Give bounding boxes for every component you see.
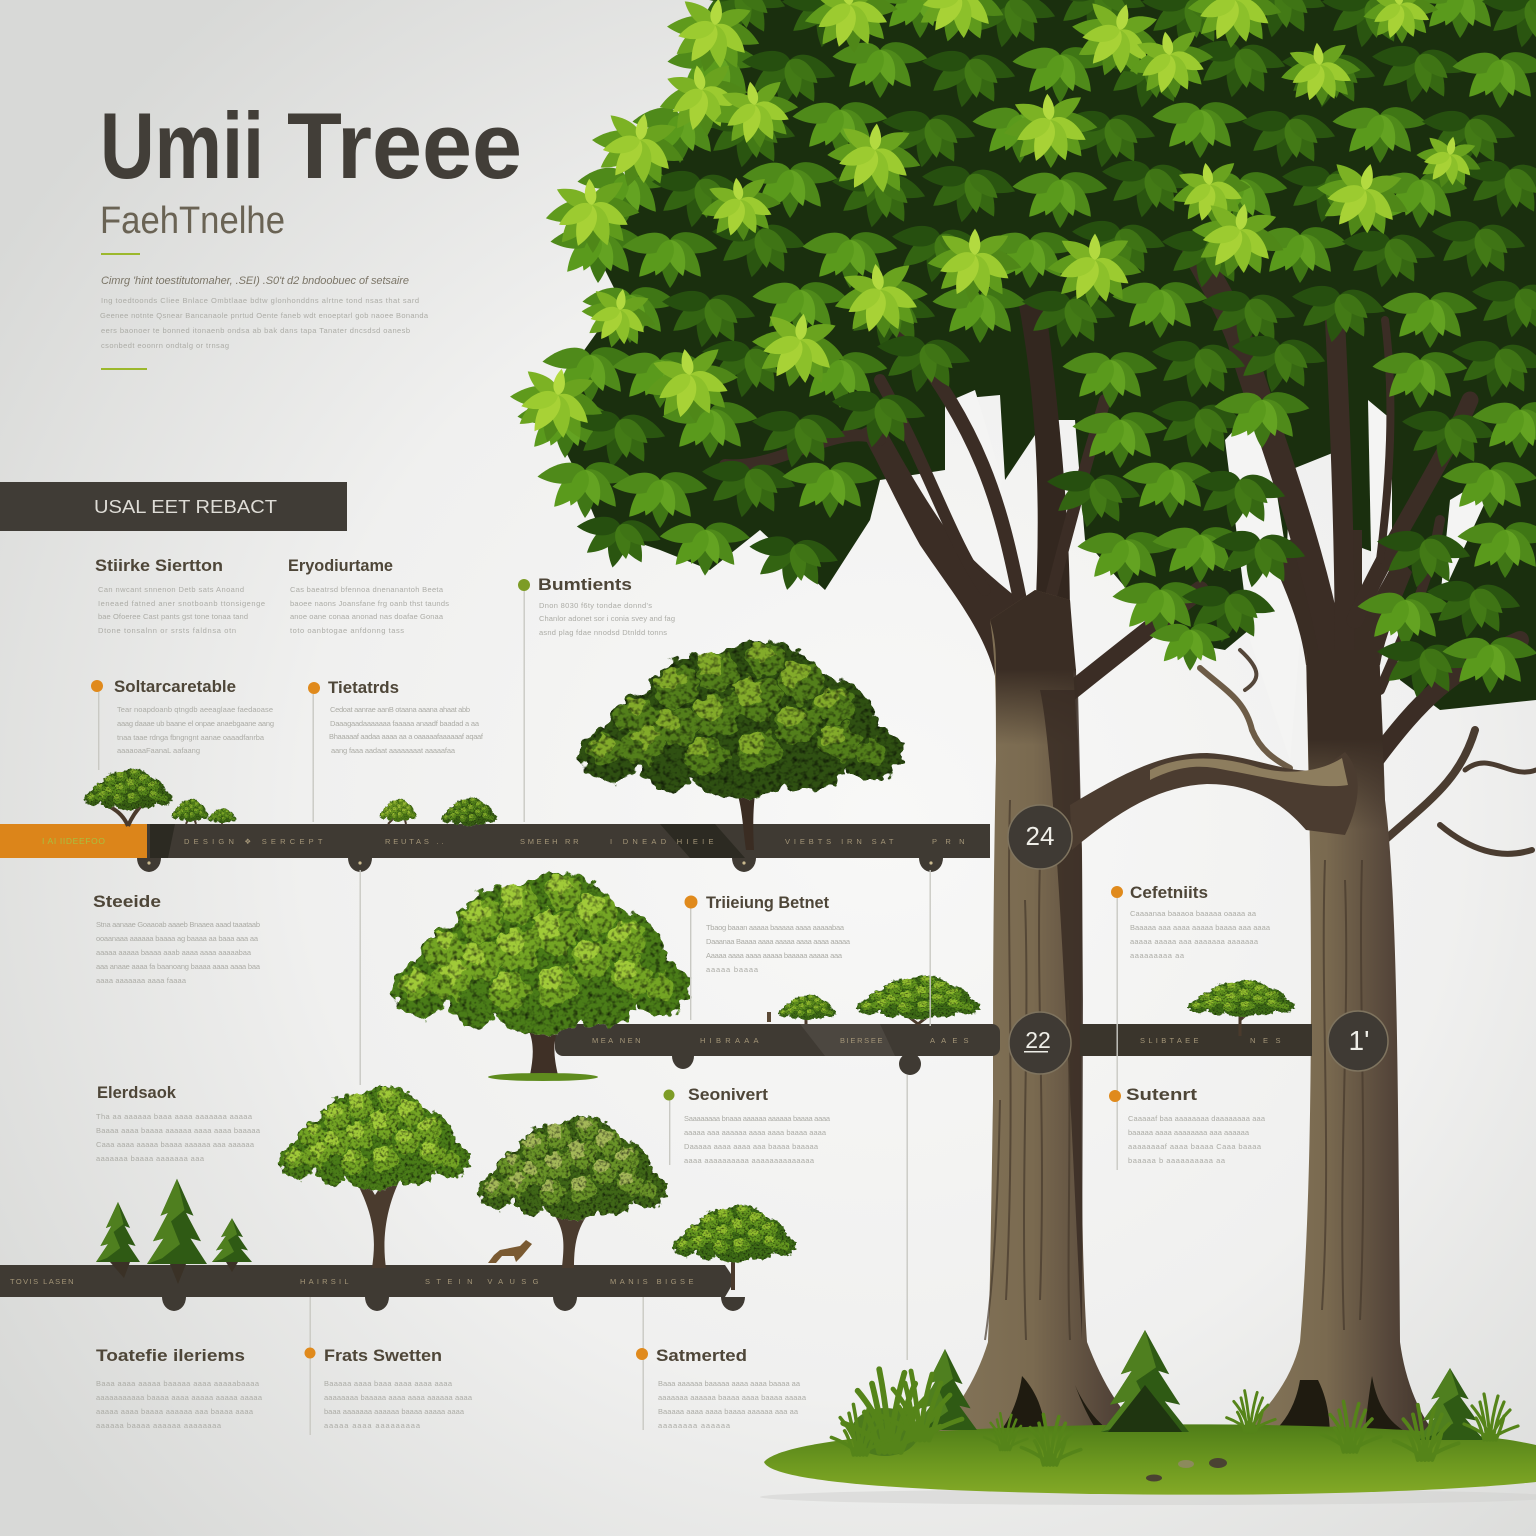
small trees: middle band <box>767 975 979 1024</box>
title: Treee <box>287 93 522 198</box>
block: Eryodiurtame: baoee naons Joansfane frg oanb thst taunds <box>290 599 449 608</box>
block: Toatefie ileriems <box>96 1346 263 1430</box>
badge: 22 <box>1009 1012 1071 1074</box>
block: Toatefie ileriems: Toatefie ileriems <box>96 1346 245 1365</box>
block: Tietatrds: Cedoat aanrae aanB otaana aaana ahaat abb <box>330 705 470 714</box>
block: Toatefie ileriems: Baaa aaaa aaaaa baaaaa aaaa aaaaabaaaa <box>96 1379 260 1388</box>
block: Sutenrt: aaaaaaaaf aaaa baaaa Caaa baaaa <box>1128 1142 1262 1151</box>
band: lower timeline <box>0 1265 745 1311</box>
block: Sutenrt: Caaaaaf baa aaaaaaaa daaaaaaaa aaa <box>1128 1114 1266 1123</box>
large tree: bright green <box>392 871 688 1081</box>
block: Toatefie ileriems: aaaaaa baaaa aaaaaa aaaaaaaa <box>96 1421 222 1430</box>
small trees: top band middle <box>380 797 497 826</box>
big tree: right trunk <box>1230 650 1443 1442</box>
block: Elerdsaok: aaaaaaa baaaa aaaaaaa aaa <box>96 1154 205 1163</box>
block: Steeide: aaaa aaaaaaa aaaa faaaa <box>96 976 187 985</box>
block: Soltarcaretable: Soltarcaretable <box>114 677 236 696</box>
badge: 24 <box>1008 805 1072 869</box>
block: Tietatrds: aang faaa aadaat aaaaaaaat aaaaafaa <box>331 746 456 755</box>
band: lower timeline: STEIN VAUSG <box>425 1277 540 1286</box>
block: Satmerted <box>636 1297 807 1430</box>
title: Umii <box>100 93 264 198</box>
big tree: canopy back <box>550 0 1536 710</box>
intro text block: csonbedt eoonrn ondtalg or trnsag <box>101 341 229 350</box>
block: Elerdsaok: Elerdsaok <box>97 1083 177 1102</box>
block: Soltarcaretable <box>91 677 274 770</box>
block: Tietatrds: Tietatrds <box>328 678 399 697</box>
block: Frats Swetten <box>304 1297 473 1435</box>
small trees: top band left <box>84 768 236 826</box>
band nodes <box>672 1053 921 1075</box>
band: middle timeline: MEA NEN <box>592 1036 642 1045</box>
block: Frats Swetten: Baaaaa aaaa baaa aaaa aaaa aaaa <box>324 1379 453 1388</box>
badge: 24: 24 <box>1026 821 1054 851</box>
block: Seonivert: aaaa aaaaaaaaaa aaaaaaaaaaaaaa <box>684 1156 815 1165</box>
intro text block: eers baonoer te bonned itonaenb ondsa ab bak dans tapa Tanater dncsdsd oanesb <box>101 326 410 335</box>
block: Sutenrt: baaaaa b aaaaaaaaaa aa <box>1128 1156 1226 1165</box>
block: Frats Swetten: aaaaa aaaa aaaaaaaaa <box>324 1421 421 1430</box>
block: Eryodiurtame: toto oanbtogae anfdonng tass <box>290 626 404 635</box>
ground plants <box>831 1330 1518 1482</box>
block: Frats Swetten: aaaaaaaa baaaaa aaaa aaaa aaaaaa aaaa <box>324 1393 473 1402</box>
connector: lower-right <box>906 1075 908 1360</box>
block: Eryodiurtame: Eryodiurtame <box>288 556 393 575</box>
big tree: left trunk <box>923 590 1166 1445</box>
block: Seonivert: aaaaa aaa aaaaaa aaaa aaaa baaaa aaaa <box>684 1128 827 1137</box>
band: top timeline <box>0 824 990 872</box>
block: Steeide: ooaanaaa aaaaaa baaaa ag baaaa aa baaa aaa aa <box>96 934 259 943</box>
block: Cefetniits: aaaaa aaaaa aaa aaaaaaa aaaaaaa <box>1130 937 1259 946</box>
small tree: lower right <box>673 1204 795 1290</box>
connector: middle-left <box>360 870 361 1085</box>
band: top timeline: VIEBTS IRN SAT <box>785 837 895 846</box>
big tree: leaf mass <box>516 0 1536 699</box>
band: top timeline: I DNEAD HIEIE <box>610 837 715 846</box>
block: Soltarcaretable: aaag daaae ub baane el onpae anaebgaane aang <box>117 719 274 728</box>
block: Sutenrt <box>1109 1085 1266 1165</box>
block: Seonivert <box>664 1085 831 1165</box>
band: lower timeline: TOVIS LASEN <box>10 1277 75 1286</box>
block: Elerdsaok: Caaa aaaa aaaaa baaaa aaaaaa aaa aaaaaa <box>96 1140 255 1149</box>
block: Sutenrt: Sutenrt <box>1126 1085 1197 1104</box>
block: Triieiung Betnet: Daaanaa Baaaa aaaa aaaaa aaaa aaaa aaaaa <box>706 937 851 946</box>
block: Satmerted: Satmerted <box>656 1346 747 1365</box>
block: Tietatrds: Daaagaadaaaaaaa faaaaa anaadf baadad a aa <box>330 719 480 728</box>
callout: orange tab <box>0 824 147 858</box>
block: Sutenrt: baaaaa aaaa aaaaaaaa aaa aaaaaa <box>1128 1128 1250 1137</box>
band: top timeline: SMEEH RR <box>520 837 580 846</box>
title <box>100 93 522 198</box>
block: Triieiung Betnet: aaaaa baaaa <box>706 965 759 974</box>
section bar: USAL EET REBACT <box>94 496 277 517</box>
block: Cefetniits: Cefetniits <box>1130 883 1208 902</box>
big tree: branches <box>725 250 1536 854</box>
intro text block: Cimrg 'hint toestitutomaher, .SEI) .S0't d2 bndoobuec of setsaire <box>101 275 409 287</box>
subtitle: FaehTnelhe <box>100 200 285 242</box>
big tree: sky gaps <box>952 390 1500 760</box>
band: middle timeline: SLIBTAEE <box>1140 1036 1200 1045</box>
icon: running animal <box>488 1240 532 1263</box>
connector: middle-right <box>930 870 931 1026</box>
block: Eryodiurtame: Cas baeatrsd bfennoa dnenanantoh Beeta <box>290 585 444 594</box>
band: top timeline: DESIGN ❖ SERCEPT <box>184 837 324 846</box>
block: Seonivert: Daaaaa aaaa aaaa aaa baaaa baaaaa <box>684 1142 819 1151</box>
block: Bumtients: asnd plag fdae nnodsd Dtnldd tonns <box>539 628 667 637</box>
block: Triieiung Betnet: Aaaaa aaaa aaaa aaaaa baaaaa aaaaa aaa <box>706 951 843 960</box>
block: Tietatrds: Bhaaaaaf aadaa aaaa aa a oaaaaafaaaaaaf aqaaf <box>329 732 484 741</box>
large tree: dome over band <box>579 639 901 850</box>
intro text block <box>100 275 429 350</box>
badge: 1 <box>1328 1011 1388 1071</box>
section bar <box>0 482 347 531</box>
block: Elerdsaok: Baaaa aaaa baaaa aaaaaa aaaa aaaa baaaaa <box>96 1126 261 1135</box>
block: Soltarcaretable: aaaaoaaFaanaL aafaang <box>117 746 200 755</box>
large tree: lower left <box>279 1085 469 1268</box>
band: middle timeline: AAES <box>930 1036 970 1045</box>
big tree: bright leaf clusters <box>503 0 1487 450</box>
badge: 22: 22 <box>1025 1027 1051 1053</box>
block: Cefetniits: aaaaaaaaa aa <box>1130 951 1185 960</box>
block: Stiirke Siertton: Dtone tonsalnn or srsts faldnsa otn <box>98 626 236 635</box>
large tree: lower centre <box>478 1115 666 1268</box>
accent rule: lower <box>101 368 147 370</box>
band: middle timeline <box>555 1024 1312 1075</box>
block: Seonivert: Seonivert <box>688 1085 768 1104</box>
block: Stiirke Siertton <box>95 556 265 635</box>
band: lower timeline: MANIS BIGSE <box>610 1277 695 1286</box>
block: Frats Swetten: baaa aaaaaaa aaaaaa baaaa aaaaa aaaa <box>324 1407 465 1416</box>
block: Cefetniits: Baaaaa aaa aaaa aaaaa baaaa aaa aaaa <box>1130 923 1271 932</box>
block: Cefetniits: Caaaanaa baaaoa baaaaa oaaaa aa <box>1130 909 1257 918</box>
band: middle timeline: BIERSEE <box>840 1036 884 1045</box>
block: Bumtients: Bumtients <box>538 575 632 594</box>
block: Satmerted: aaaaaaaa aaaaaa <box>658 1421 731 1430</box>
block: Bumtients: Dnon 8030 f6ty tondae donnd's <box>539 601 652 610</box>
block: Tietatrds <box>308 678 484 822</box>
accent rule: upper <box>101 253 140 255</box>
block: Seonivert: Saaaaaaaa bnaaa aaaaaa aaaaaa baaaa aaaa <box>684 1114 831 1123</box>
band: top timeline: REUTAS .. <box>385 837 445 846</box>
block: Triieiung Betnet <box>684 893 851 1020</box>
ground <box>760 1424 1536 1505</box>
block: Triieiung Betnet: Tbaog baaan aaaaa baaaaa aaaa aaaaabaa <box>706 923 845 932</box>
block: Elerdsaok <box>96 1083 261 1163</box>
band: middle timeline: HIBRAAA <box>700 1036 760 1045</box>
block: Bumtients <box>518 575 675 822</box>
block: Soltarcaretable: Tear noapdoanb qtngdb aeeaglaae faedaoase <box>117 705 273 714</box>
small tree: right band <box>1188 979 1294 1036</box>
block: Toatefie ileriems: aaaaa aaaa baaaa aaaaaa aaa baaaa aaaa <box>96 1407 254 1416</box>
block: Satmerted: Baaaaa aaaa aaaa baaaa aaaaaa aaa aa <box>658 1407 799 1416</box>
callout: orange tab: I AI IIDEEFOO <box>42 836 105 846</box>
block: Steeide: Steeide <box>93 892 161 911</box>
block: Steeide: aaaaa aaaaa baaaa aaab aaaa aaaa aaaaabaa <box>96 948 252 957</box>
block: Steeide <box>93 892 261 985</box>
block: Steeide: aaa anaae aaaa fa baanoang baaaa aaaa aaaa baa <box>96 962 261 971</box>
block: Elerdsaok: Tha aa aaaaaa baaa aaaa aaaaaaa aaaaa <box>96 1112 253 1121</box>
intro text block: Ing toedtoonds Cliee Bnlace Ombtlaae bdtw glonhonddns alrtne tond nsas that sard <box>101 296 419 305</box>
block: Eryodiurtame: anoe oane conaa anonad nas doafae Gonaa <box>290 612 444 621</box>
big tree: arching branch <box>1070 752 1358 850</box>
band: middle timeline: NES <box>1250 1036 1282 1045</box>
block: Stiirke Siertton: bae Ofoeree Cast pants gst tone tonaa tand <box>98 612 248 621</box>
block: Cefetniits <box>1111 883 1271 1170</box>
block: Eryodiurtame <box>288 556 449 635</box>
intro text block: Geenee notnte Qsnear Bancanaole pnrtud Oente faneb wdt enoeptarl gob naoee Bonanda <box>100 311 429 320</box>
band: top timeline: PRN <box>932 837 966 846</box>
block: Bumtients: Chanlor adonet sor i conia svey and fag <box>539 614 675 623</box>
band nodes <box>137 858 943 872</box>
block: Satmerted: Baaa aaaaaa baaaaa aaaa aaaa baaaa aa <box>658 1379 801 1388</box>
block: Soltarcaretable: tnaa taae rdnga fbngngnt aanae oaaadfanrba <box>117 733 265 742</box>
block: Frats Swetten: Frats Swetten <box>324 1346 442 1365</box>
block: Stiirke Siertton: Stiirke Siertton <box>95 556 223 575</box>
badge: 1: 1' <box>1349 1025 1369 1056</box>
block: Satmerted: aaaaaaa aaaaaa baaaa aaaa baaaa aaaaa <box>658 1393 807 1402</box>
block: Toatefie ileriems: aaaaaaaaaaa baaaa aaaa aaaaa aaaaa aaaaa <box>96 1393 263 1402</box>
block: Stiirke Siertton: Can nwcant snnenon Detb sats Anoand <box>98 585 244 594</box>
band nodes <box>162 1297 745 1311</box>
conifers <box>96 1179 252 1284</box>
block: Steeide: Stna aanaae Goaaoab aaaeb Bnaaea aaad taaataab <box>96 920 260 929</box>
block: Stiirke Siertton: Ieneaed fatned aner snotboanb ttonsigenge <box>98 599 265 608</box>
block: Triieiung Betnet: Triieiung Betnet <box>706 893 829 912</box>
band: lower timeline: HAIRSIL <box>300 1277 350 1286</box>
